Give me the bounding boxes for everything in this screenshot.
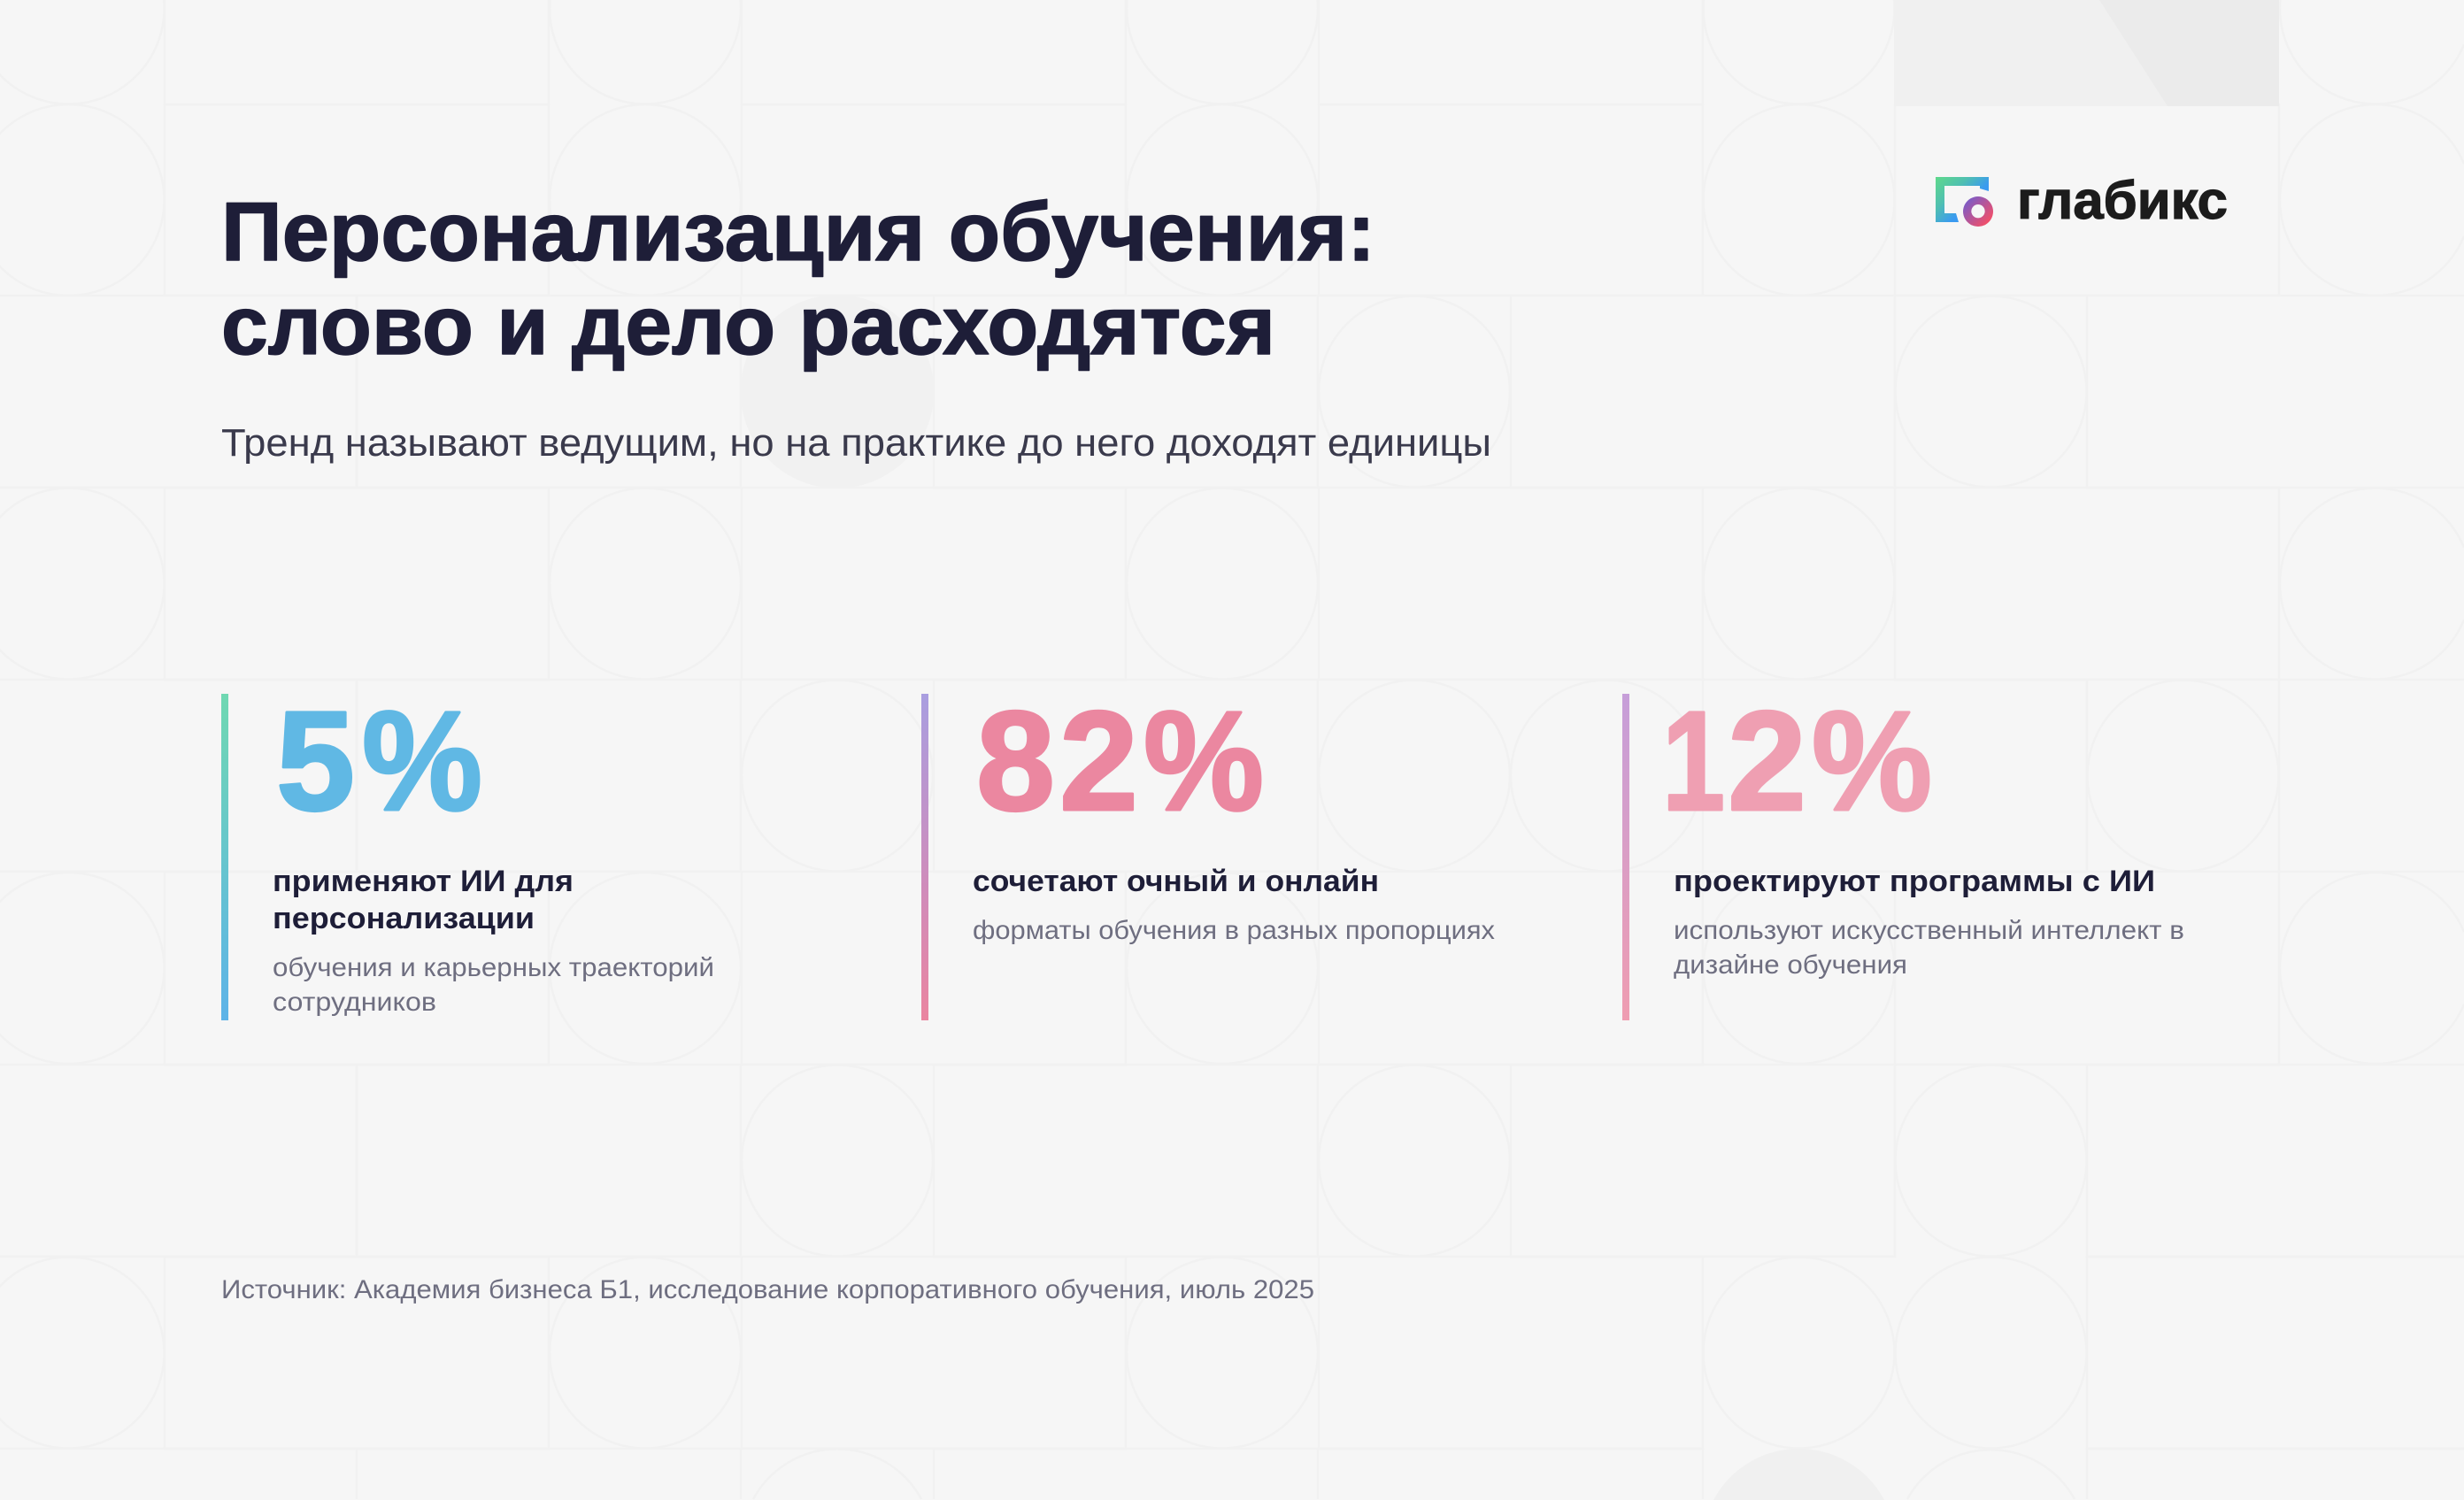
panel: stat 82% [921,681,1495,1020]
title: Персонализация обучения: [221,185,1375,278]
stat description [273,953,714,1017]
stat description: форматы обучения в разных пропорциях [973,916,1495,945]
stat heading [273,865,574,935]
stat description [1674,916,2184,980]
big number: % [362,681,482,840]
stat description: сотрудников [273,988,436,1017]
big number [976,681,1264,840]
logo [1936,171,2228,230]
big number: % [1143,681,1264,840]
subtitle: Тренд называют ведущим, но на практике до него доходят единицы [221,421,1491,465]
stat heading: персонализации [273,902,535,935]
big number: 5 [276,681,355,840]
accent bar [1622,694,1629,1020]
source note: Источник: Академия бизнеса Б1, исследование корпоративного обучения, июль 2025 [221,1275,1314,1304]
stat description: обучения и карьерных траекторий [273,953,714,982]
stat description: дизайне обучения [1674,950,1907,980]
title [221,185,1375,372]
logo wordmark: глабикс [2017,171,2228,230]
big number [1662,681,1932,840]
accent bar [221,694,228,1020]
stat description: используют искусственный интеллект в [1674,916,2184,945]
title: слово и дело расходятся [221,279,1275,372]
accent bar [921,694,928,1020]
big number [276,681,482,840]
stat heading: сочетают очный и онлайн [973,865,1379,898]
stat heading: проектируют программы с ИИ [1674,865,2155,898]
decorative top right panel [1894,0,2279,106]
big number: 82 [976,681,1138,840]
stat heading: применяют ИИ для [273,865,574,898]
panel: stat 12% [1622,681,2184,1020]
big number: 1 [1662,681,1725,840]
big number: 2 [1728,681,1806,840]
panel: stat 5% [221,681,714,1020]
icon: logo mark [1936,177,1993,227]
big number: % [1812,681,1932,840]
